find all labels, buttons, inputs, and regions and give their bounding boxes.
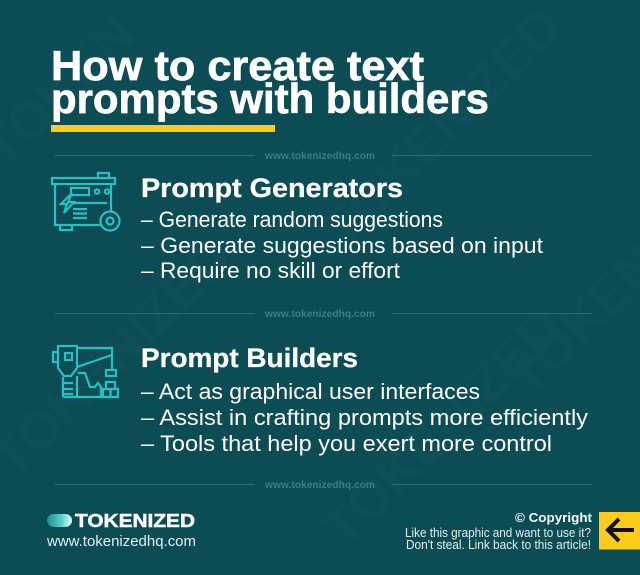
list: generators: – Generate random suggestions <box>141 207 443 232</box>
divider: bottom: www.tokenizedhq.com <box>264 480 375 491</box>
list: builders: – Assist in crafting prompts more efficiently <box>141 405 588 430</box>
logo: TOKENIZED <box>75 510 195 531</box>
list: generators: – Require no skill or effort <box>141 258 400 283</box>
copyright note: © Copyright <box>515 510 593 525</box>
divider: top: www.tokenizedhq.com <box>264 151 375 162</box>
copyright note: Like this graphic and want to use it? <box>405 526 591 540</box>
list: builders <box>141 379 588 456</box>
icon: generator <box>52 173 120 230</box>
copyright note: Don't steal. Link back to this article! <box>406 538 591 552</box>
list: builders: – Tools that help you exert more control <box>141 431 552 456</box>
heading: Prompt Builders: Prompt Builders <box>141 343 358 373</box>
list: generators: – Generate suggestions based on input <box>141 233 543 258</box>
heading: Prompt Generators: Prompt Generators <box>141 173 403 203</box>
title: prompts with builders <box>51 75 489 122</box>
copyright note <box>405 510 593 552</box>
title: How to create text <box>51 42 424 89</box>
text: TOKENIZED <box>311 296 573 558</box>
icon: back arrow <box>599 512 640 550</box>
list: builders: – Act as graphical user interfaces <box>141 379 480 404</box>
title underline <box>51 125 275 132</box>
list: generators <box>141 207 543 283</box>
website url: www.tokenizedhq.com <box>46 533 196 550</box>
text: TOKENIZED <box>311 0 573 258</box>
icon: crane <box>53 346 118 397</box>
divider: middle: www.tokenizedhq.com <box>264 309 375 320</box>
title <box>51 42 489 122</box>
